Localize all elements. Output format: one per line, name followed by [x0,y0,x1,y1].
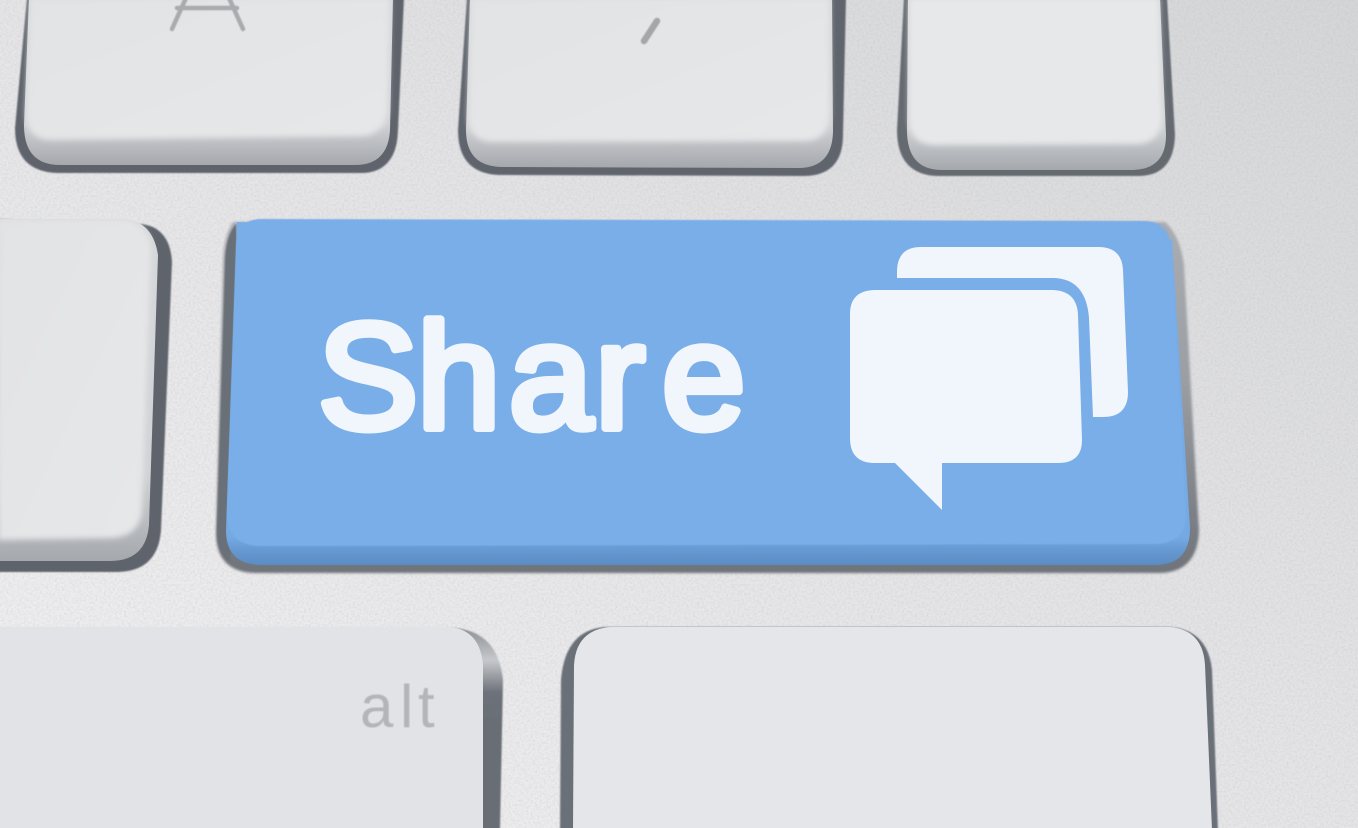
letter A [172,0,243,29]
key: space bar [560,627,1218,828]
label: alt: alt [360,673,435,740]
front bubble [850,290,1082,510]
key: blue Share [216,219,1199,573]
key top face [227,219,1186,546]
icon: speech bubbles [850,247,1128,510]
key side [226,222,1190,565]
slash glyph [644,21,657,41]
key: alt [0,627,503,828]
key: blank left [0,219,172,572]
key: blank top right [897,0,1175,176]
key: A [15,0,404,173]
key: slash [458,0,846,176]
key well shadow [216,222,1199,573]
left well dark edge [217,224,240,562]
back bubble [897,247,1128,417]
word: Share: Share [318,292,745,460]
